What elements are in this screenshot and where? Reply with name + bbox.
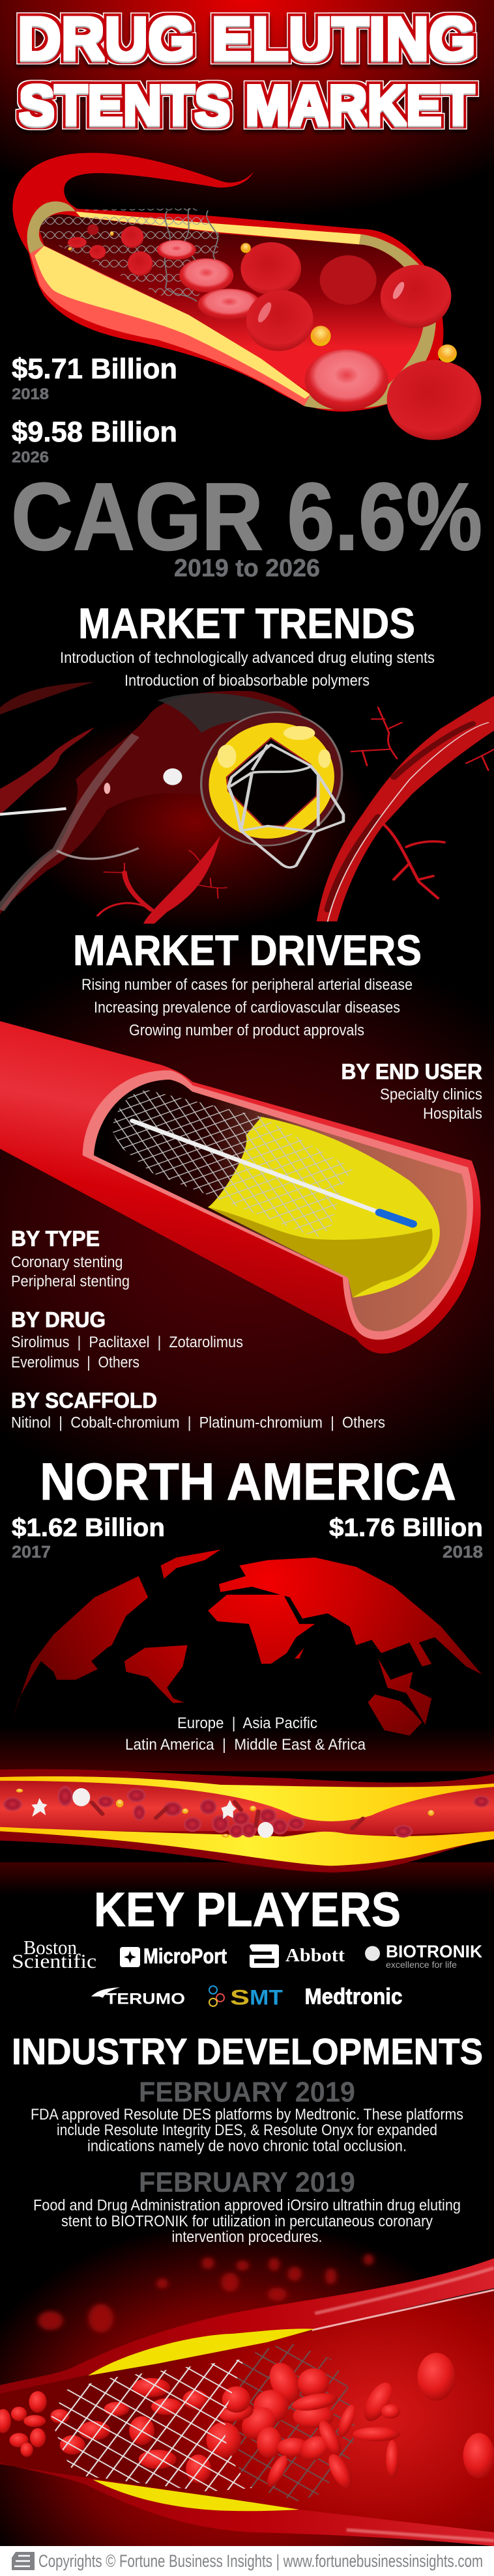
- logo: terumo: TERUMO: [106, 1990, 185, 2008]
- trend two: Introduction of bioabsorbable polymers: [124, 672, 370, 690]
- lower pink wall bands: [30, 245, 310, 406]
- tube interior: [94, 1080, 467, 1332]
- development one copy: indications namely de novo chronic total occlusion.: [87, 2137, 407, 2155]
- by end user heading: BY END USER: [341, 1059, 482, 1084]
- driver two: Increasing prevalence of cardiovascular diseases: [94, 999, 400, 1016]
- year label 2018: 2018: [12, 385, 49, 403]
- logo: abbott: Abbott: [285, 1946, 345, 1966]
- logo: terumo: [91, 1987, 185, 2008]
- catheter wire: [132, 1121, 379, 1212]
- front stent mesh: [48, 2357, 255, 2493]
- lipid droplets: [16, 1789, 434, 1838]
- logo: boston scientific: Boston: [23, 1936, 77, 1959]
- heading: north america: NORTH AMERICA: [40, 1453, 456, 1511]
- heading: market trends: MARKET TRENDS: [78, 599, 415, 647]
- driver three: Growing number of product approvals: [129, 1022, 364, 1039]
- lower yellow plaque: [93, 2480, 299, 2511]
- inner pink rim: [83, 1071, 473, 1339]
- upper yellow plaque: [0, 1776, 494, 1821]
- by scaffold heading: BY SCAFFOLD: [11, 1388, 157, 1412]
- main title: line two: STENTS MARKET: [19, 74, 474, 137]
- south america: [124, 1645, 188, 1703]
- heading: key players: KEY PLAYERS: [94, 1883, 401, 1937]
- date two: FEBRUARY 2019: [139, 2166, 355, 2198]
- lower red capillary branch: [98, 835, 227, 924]
- right coronary vessel: [317, 696, 494, 921]
- market value 2026: $9.58 Billion: [12, 416, 177, 448]
- africa: [208, 1595, 315, 1664]
- scaffold list: Nitinol | Cobalt-chromium | Platinum-chromium | Others: [11, 1414, 385, 1431]
- logo: smt: S: [230, 1986, 250, 2009]
- grey vessel sheen: [158, 693, 302, 733]
- logo: boston scientific: Scientific: [12, 1950, 96, 1972]
- southeast asian islands: [378, 1659, 431, 1725]
- logo: microport: MicroPort: [143, 1944, 227, 1968]
- background glow: [0, 2230, 494, 2546]
- fade into vein band: [0, 1726, 494, 1771]
- white blood cells: [31, 1788, 274, 1838]
- golden lipid droplets: [68, 231, 457, 363]
- left coronary vessel: [0, 691, 302, 914]
- stent mesh: [107, 1087, 359, 1242]
- yellow plaque: [208, 1117, 440, 1298]
- CAGR period: 2019 to 2026: [174, 555, 320, 582]
- shaded plaque underside: [208, 1207, 433, 1298]
- rod-shaped cells: [92, 1802, 363, 1828]
- wall sheen: [315, 2268, 494, 2541]
- other regions line two: Latin America | Middle East & Africa: [125, 1736, 366, 1754]
- plaque ring with stent: [190, 705, 353, 867]
- driver one: Rising number of cases for peripheral arterial disease: [81, 976, 413, 994]
- background glow: [19, 710, 371, 933]
- vessel rim: [190, 705, 353, 852]
- hospitals: Hospitals: [423, 1105, 482, 1123]
- year label 2026: 2026: [12, 449, 49, 466]
- segment: by end user: [341, 1059, 482, 1123]
- footer: [0, 2546, 494, 2576]
- mid-left branch: [0, 727, 94, 815]
- illustration: red world globe: [12, 1550, 482, 1735]
- by type heading: BY TYPE: [11, 1227, 100, 1250]
- illustration: blood vessel band with plaque and cells: [0, 1769, 494, 1873]
- open lumen: [227, 738, 318, 826]
- illustration: artery with stent and blood cells: [12, 153, 482, 440]
- stent mesh: [39, 208, 219, 303]
- silver stent struts: [228, 745, 343, 867]
- logo: microport: [120, 1944, 227, 1968]
- tube outer wall: [0, 1021, 481, 1354]
- logo: abbott: [250, 1944, 345, 1968]
- drug list line one: Sirolimus | Paclitaxel | Zotarolimus: [11, 1334, 243, 1351]
- large red blood cells: [179, 242, 482, 440]
- eurasia: [219, 1558, 482, 1674]
- illustration: coronary vessels with stent cross-section: [0, 682, 494, 933]
- logo: boston scientific: [12, 1936, 96, 1972]
- by drug heading: BY DRUG: [11, 1308, 106, 1332]
- vessel highlights: [0, 735, 136, 910]
- north america value 2017: $1.62 Billion: [12, 1514, 165, 1542]
- north america: [12, 1576, 148, 1718]
- flowing red blood cells: [0, 2353, 494, 2491]
- lower plaque: [35, 245, 310, 399]
- logos row: [12, 1936, 482, 2009]
- inner wall light edge: [312, 2290, 494, 2330]
- tan wall layer, left and right: [27, 201, 436, 410]
- development one copy: include Resolute Integrity DES, & Resolute Onyx for expanded: [57, 2121, 437, 2139]
- header red glow: [0, 0, 494, 273]
- stent outline struts: [165, 208, 218, 301]
- label 2017: 2017: [12, 1542, 51, 1561]
- logo: biotronik: BIOTRONIK: [386, 1942, 482, 1961]
- artery lumen interior: [0, 2289, 494, 2534]
- development two copy: [33, 2197, 461, 2246]
- lower artery wall: [0, 2463, 494, 2546]
- development two copy: Food and Drug Administration approved iOrsiro ultrathin drug eluting: [33, 2197, 461, 2214]
- logo: medtronic: Medtronic: [305, 1985, 403, 2009]
- rear stent mesh: [232, 2344, 355, 2501]
- development two copy: intervention procedures.: [172, 2228, 322, 2246]
- illustration: cut-away artery tube with stent and balloon catheter: [0, 1021, 481, 1354]
- plaque mottling: [218, 726, 331, 768]
- development two copy: stent to BIOTRONIK for utilization in percutaneous coronary: [61, 2213, 433, 2230]
- logo: biotronik: [365, 1942, 482, 1970]
- lumen: [0, 1780, 494, 1836]
- footer white bar: [0, 2546, 494, 2576]
- segment: by scaffold: [11, 1388, 385, 1431]
- specialty clinics: Specialty clinics: [380, 1086, 482, 1103]
- madagascar: [295, 1648, 304, 1659]
- blood cells: [3, 1786, 489, 1838]
- footer logo: [12, 2552, 35, 2570]
- upper-left vessel: [0, 682, 94, 714]
- yellow plaque ring: [199, 717, 344, 845]
- fade out of vein band: [0, 1862, 494, 1895]
- heading: market drivers: MARKET DRIVERS: [73, 926, 422, 974]
- segment: by drug: [11, 1308, 243, 1371]
- logo: smt: [209, 1986, 283, 2009]
- artery outer wall: [12, 153, 443, 412]
- main title: line one: DRUG ELUTING: [18, 5, 476, 72]
- greenland: [161, 1550, 220, 1579]
- blurred background cells: [38, 2254, 373, 2332]
- coronary stenting: Coronary stenting: [11, 1253, 123, 1271]
- upper yellow plaque: [88, 2329, 315, 2375]
- development one copy: [31, 2106, 463, 2155]
- peripheral stenting: Peripheral stenting: [11, 1272, 130, 1291]
- segment: by type: [11, 1227, 130, 1291]
- label 2018: 2018: [443, 1542, 483, 1561]
- section background glow behind drivers and tube: [0, 938, 494, 1511]
- white specular highlights: [0, 768, 182, 859]
- upper plaque: [76, 212, 360, 244]
- north america value 2018: $1.76 Billion: [329, 1514, 483, 1542]
- balloon catheter blue tip: [379, 1212, 413, 1224]
- logo: biotronik: excellence for life: [386, 1959, 457, 1970]
- small cells inside the stent: [68, 224, 196, 276]
- upper artery wall: [0, 2258, 494, 2394]
- artery lumen: [39, 214, 425, 392]
- logo: smt: MT: [250, 1986, 283, 2009]
- trend one: Introduction of technologically advanced drug eluting stents: [60, 649, 435, 667]
- australia: [368, 1694, 422, 1735]
- date one: FEBRUARY 2019: [139, 2076, 355, 2108]
- market value 2018: $5.71 Billion: [12, 353, 177, 385]
- other regions line one: Europe | Asia Pacific: [177, 1715, 317, 1732]
- vessel dark red body: [0, 1769, 494, 1873]
- lower yellow plaque: [0, 1827, 494, 1866]
- illustration: stented artery with blood flow: [0, 2230, 494, 2546]
- drug list line two: Everolimus | Others: [11, 1354, 139, 1371]
